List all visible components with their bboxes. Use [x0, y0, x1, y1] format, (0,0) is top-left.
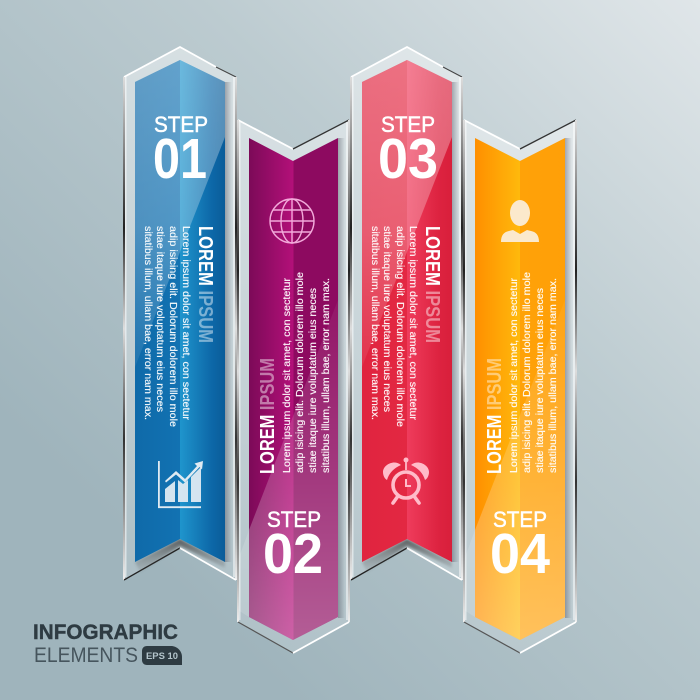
- glass frame 01: [123, 47, 237, 580]
- step number 02: 02: [263, 522, 323, 586]
- body text 03: sitatibus illum, ullam bae, error nam max.: [369, 226, 380, 420]
- step label 02: STEP: [267, 507, 321, 532]
- glare 02: [249, 300, 338, 640]
- glare 04: [475, 300, 565, 640]
- body text 03: stiae itaque iure voluptatum eius neces: [381, 226, 392, 412]
- icon: person: [501, 200, 539, 242]
- step label 04: STEP: [493, 507, 547, 532]
- body text 04: stiae itaque iure voluptatum eius neces: [535, 288, 546, 473]
- glass frame 04: [463, 120, 577, 653]
- body text 04: [509, 272, 559, 473]
- step number 01: 01: [153, 127, 207, 191]
- body text 01: [142, 226, 191, 427]
- panel: step 01: [123, 47, 237, 580]
- body text 04: Lorem ipsum dolor sit amet, con sectetur: [509, 277, 520, 473]
- body text 03: [369, 226, 418, 427]
- panel: step 04: [463, 120, 577, 653]
- title: infographic: INFOGRAPHIC: [33, 620, 178, 644]
- heading 02: LOREM IPSUM: [256, 358, 279, 474]
- body text 02: sitatibus illum, ullam bae, error nam max.: [321, 278, 332, 473]
- icon: globe: [270, 199, 314, 243]
- icon: growth chart: [158, 461, 203, 508]
- body text 02: stiae itaque iure voluptatum eius neces: [308, 288, 319, 473]
- body text 04: sitatibus illum, ullam bae, error nam max.: [548, 278, 559, 473]
- body text 01: stiae itaque iure voluptatum eius neces: [154, 226, 165, 412]
- badge: eps 10: [142, 646, 182, 665]
- body text 02: Lorem ipsum dolor sit amet, con sectetur: [282, 277, 293, 473]
- glass frame 03: [350, 47, 463, 580]
- body text 02: [282, 272, 332, 473]
- step number 04: 04: [490, 522, 550, 586]
- heading 03: LOREM IPSUM: [421, 226, 444, 343]
- panel: step 03: [350, 47, 463, 580]
- ribbon 01: [135, 60, 225, 562]
- badge: eps 10: EPS 10: [146, 651, 178, 662]
- body text 01: adip isicing elit. Dolorum dolorem illo mole: [167, 226, 178, 427]
- ribbon 03: [362, 60, 452, 562]
- body text 03: adip isicing elit. Dolorum dolorem illo mole: [394, 226, 405, 427]
- body text 03: Lorem ipsum dolor sit amet, con sectetur: [407, 226, 418, 421]
- heading 04: LOREM IPSUM: [483, 358, 506, 474]
- title block: [33, 620, 182, 667]
- title: elements: ELEMENTS: [34, 643, 138, 667]
- icon: alarm clock: [383, 458, 429, 503]
- ribbon 02: [249, 138, 338, 640]
- step label 01: STEP: [154, 112, 208, 137]
- step number 03: 03: [378, 127, 438, 191]
- body text 04: adip isicing elit. Dolorum dolorem illo mole: [522, 272, 533, 473]
- panel: step 02: [237, 120, 350, 653]
- ribbon 04: [475, 138, 565, 640]
- glare 03: [362, 60, 452, 367]
- glare 01: [135, 60, 225, 367]
- body text 02: adip isicing elit. Dolorum dolorem illo mole: [295, 272, 306, 473]
- glass frame 02: [237, 120, 350, 653]
- body text 01: sitatibus illum, ullam bae, error nam max.: [142, 226, 153, 420]
- heading 01: LOREM IPSUM: [194, 226, 217, 343]
- step label 03: STEP: [381, 112, 435, 137]
- body text 01: Lorem ipsum dolor sit amet, con sectetur: [180, 226, 191, 421]
